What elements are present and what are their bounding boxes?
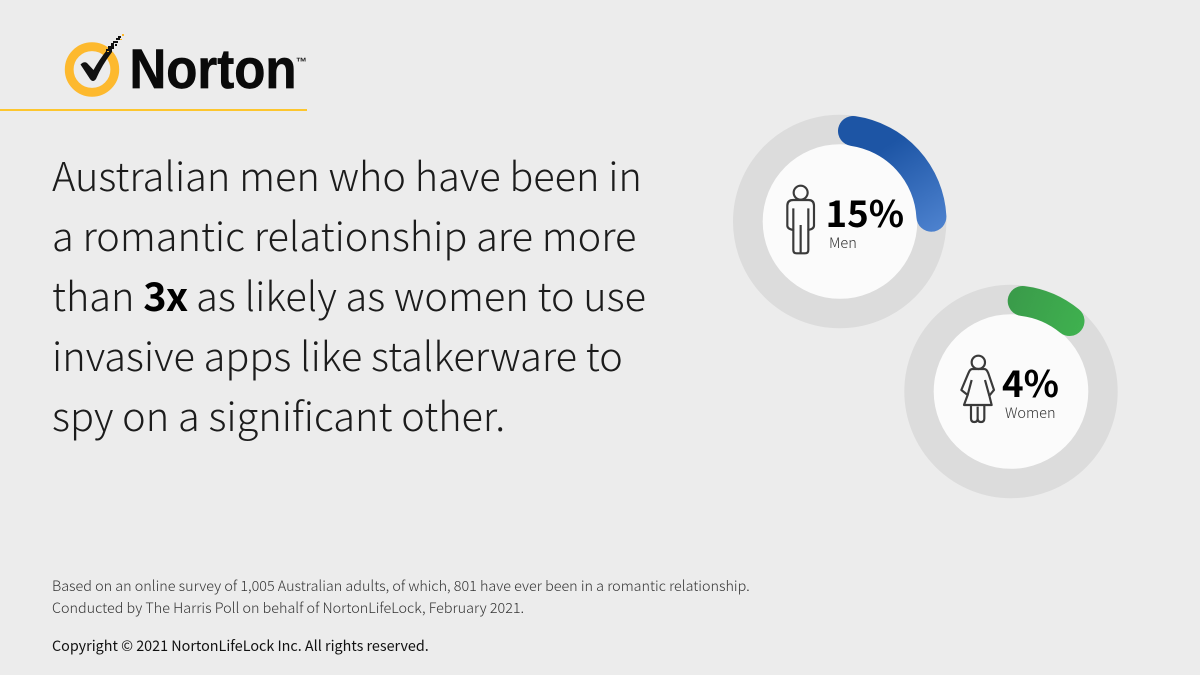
- logo trademark: ™: [296, 55, 307, 69]
- headline statement: invasive apps like stalkerware to: [52, 326, 623, 382]
- men inner disc: [763, 144, 917, 299]
- men value arc: [853, 131, 931, 217]
- logo wordmark: Norton: [130, 37, 296, 100]
- headline statement: spy on a significant other.: [52, 386, 505, 442]
- women value arc: [1023, 301, 1070, 321]
- donut chart: men 15%: [748, 130, 931, 313]
- men label: Men: [829, 232, 857, 253]
- men ring track: [748, 130, 931, 313]
- icon: woman: [961, 356, 994, 422]
- headline statement: Australian men who have been in: [52, 146, 642, 202]
- headline statement: than 3x as likely as women to use: [52, 266, 646, 322]
- women inner disc: [934, 314, 1088, 469]
- survey source note: Conducted by The Harris Poll on behalf of NortonLifeLock, February 2021.: [52, 597, 524, 618]
- survey source note: [52, 575, 750, 618]
- headline statement: a romantic relationship are more: [52, 206, 636, 262]
- women ring track: [919, 300, 1103, 483]
- logo underline: [0, 109, 307, 111]
- logo ring: [69, 47, 115, 92]
- men percentage: 15%: [826, 184, 904, 238]
- women percentage: 4%: [1002, 354, 1059, 408]
- survey source note: Based on an online survey of 1,005 Australian adults, of which, 801 have ever been in a romantic relationship.: [52, 575, 750, 596]
- icon: man: [787, 186, 814, 253]
- logo check mark: [80, 50, 112, 81]
- women label: Women: [1005, 402, 1056, 423]
- headline statement: [52, 146, 646, 442]
- copyright line: Copyright © 2021 NortonLifeLock Inc. All rights reserved.: [52, 635, 429, 656]
- logo pixel tail: [106, 34, 124, 52]
- donut chart: women 4%: [919, 300, 1103, 483]
- Norton logo: [69, 34, 307, 100]
